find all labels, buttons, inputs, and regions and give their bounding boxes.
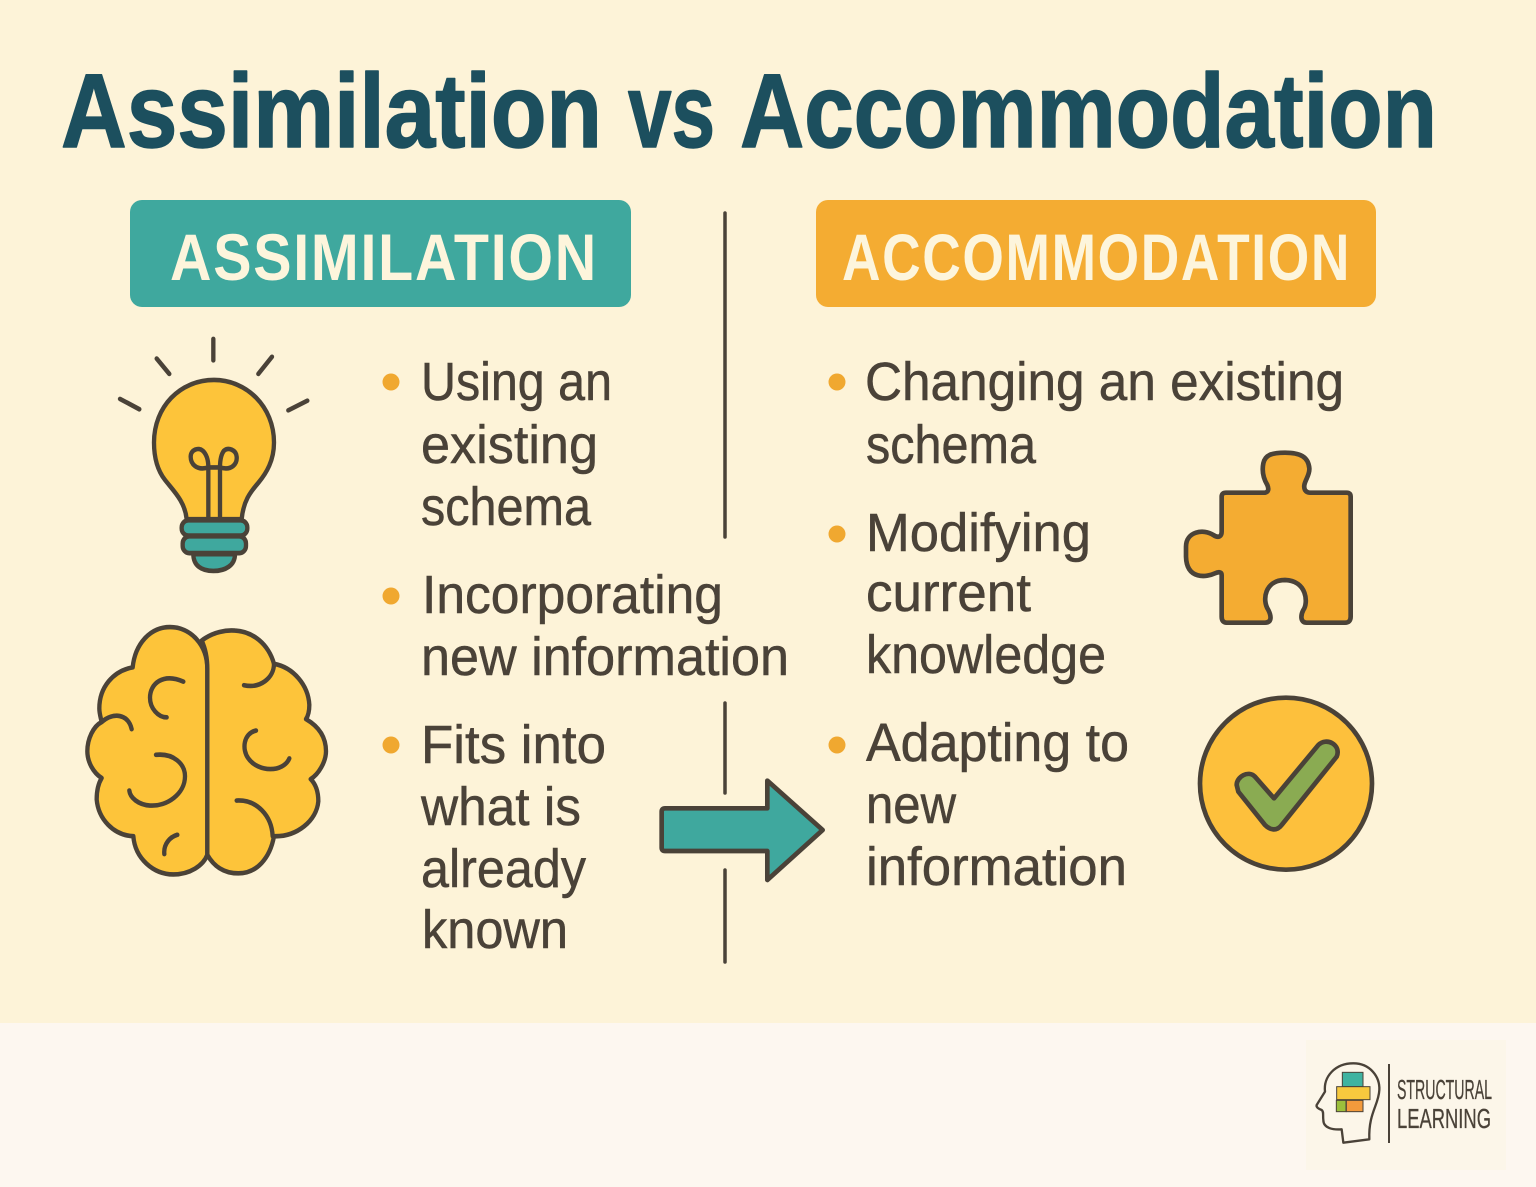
title: vs — [628, 53, 715, 170]
bullet: fits into what is already known: known — [422, 900, 568, 960]
heading: accommodation: ACCOMMODATION — [842, 220, 1351, 294]
heading: assimilation: ASSIMILATION — [170, 220, 598, 294]
bullet: adapting to new information: information — [866, 837, 1127, 897]
bullet: using an existing schema: schema — [421, 477, 592, 537]
panel: assimilation — [87, 200, 789, 960]
bullet: incorporating new information: new information — [421, 627, 789, 687]
bullet: modifying current knowledge — [828, 503, 1106, 685]
arrow: assimilation to accommodation — [662, 781, 823, 880]
bullet: using an existing schema: Using an — [421, 352, 612, 412]
panel: accommodation — [816, 200, 1376, 897]
bullet: incorporating new information: Incorporating — [422, 565, 723, 625]
icon: head with blocks — [1317, 1063, 1379, 1143]
heading: assimilation — [130, 200, 631, 307]
bullet: fits into what is already known: already — [421, 839, 586, 899]
bullet: fits into what is already known: Fits into — [421, 715, 606, 775]
bullet: changing an existing schema: schema — [866, 415, 1037, 475]
icon: light bulb — [120, 339, 307, 571]
logo: structural learning — [1306, 1040, 1506, 1170]
bullet: adapting to new information: Adapting to — [866, 713, 1129, 773]
bullet: adapting to new information — [828, 713, 1129, 897]
bullet: changing an existing schema — [828, 352, 1344, 475]
title — [61, 53, 1437, 170]
bullet: fits into what is already known: what is — [420, 777, 581, 837]
bullet: using an existing schema: existing — [421, 415, 598, 475]
icon: check mark badge — [1200, 698, 1372, 870]
bullet: incorporating new information — [382, 565, 789, 687]
bullet: modifying current knowledge: knowledge — [866, 625, 1106, 685]
bullet: adapting to new information: new — [866, 775, 957, 835]
logo: structural learning: LEARNING — [1397, 1103, 1491, 1134]
bullet: modifying current knowledge: Modifying — [866, 503, 1091, 563]
icon: puzzle piece — [1186, 453, 1351, 623]
bullet: changing an existing schema: Changing an existing — [865, 352, 1344, 412]
divider: centre line — [723, 213, 727, 962]
title: Assimilation — [61, 53, 602, 170]
icon: brain — [87, 627, 326, 874]
bullet: fits into what is already known — [382, 715, 606, 960]
heading: accommodation — [816, 200, 1376, 307]
bullet: modifying current knowledge: current — [866, 563, 1031, 623]
bullet: using an existing schema — [382, 352, 612, 537]
